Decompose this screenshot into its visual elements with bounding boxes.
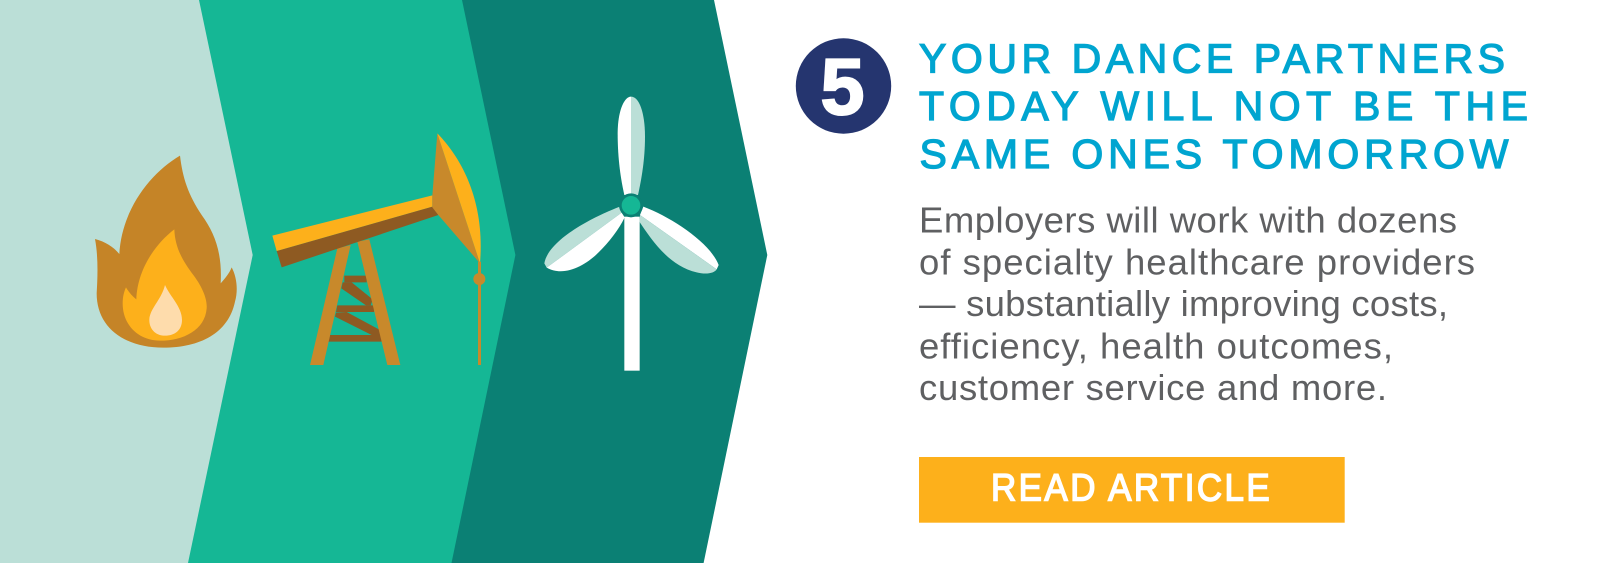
button: read article: READ ARTICLE (991, 466, 1270, 509)
number badge (796, 38, 891, 134)
heading: YOUR DANCE PARTNERS (919, 36, 1505, 82)
panel: dark green chevron (wind) (0, 0, 767, 563)
panel: pale green chevron (fire) (0, 0, 253, 563)
body text: customer service and more. (919, 367, 1387, 408)
icon: wind turbine (544, 97, 719, 371)
body text: of specialty healthcare providers (919, 242, 1475, 283)
body text: efficiency, health outcomes, (919, 325, 1393, 366)
heading: SAME ONES TOMORROW (920, 131, 1509, 177)
body text: Employers will work with dozens (919, 200, 1457, 241)
icon: flame (95, 156, 237, 348)
heading: TODAY WILL NOT BE THE (919, 83, 1528, 129)
panel: mid green chevron (oil) (0, 0, 515, 563)
body text (919, 200, 1475, 408)
number badge: 5 (820, 42, 864, 131)
heading (919, 36, 1528, 177)
icon: oil pump (272, 133, 485, 365)
body text: — substantially improving costs, (919, 283, 1448, 324)
button: read article (919, 457, 1345, 523)
